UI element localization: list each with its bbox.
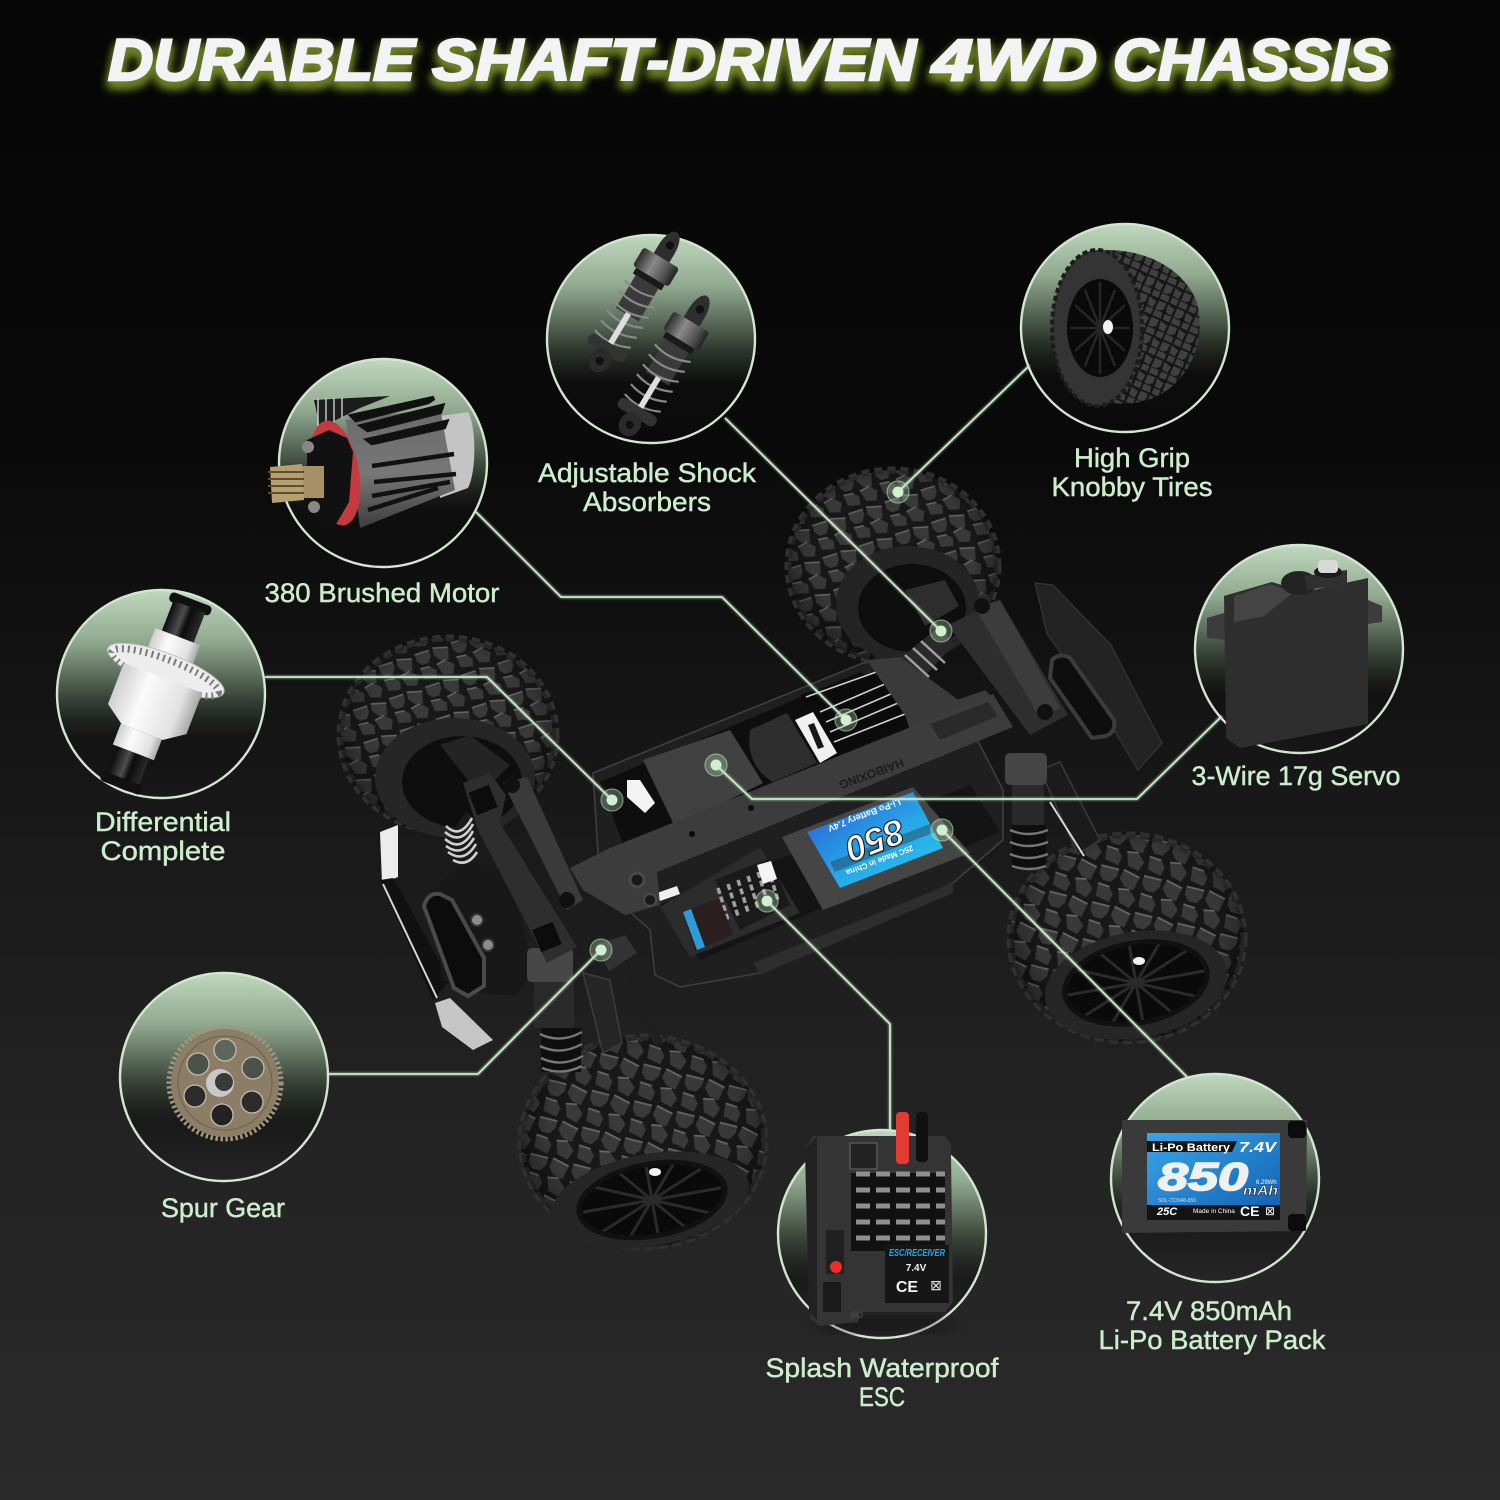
icon: battery pack: mAh bbox=[1243, 1182, 1278, 1198]
icon: battery pack: SDL-723048-850 bbox=[1158, 1198, 1196, 1204]
label: Differential bbox=[95, 807, 231, 837]
panel: spur gear bbox=[120, 973, 328, 1223]
label: ESC bbox=[859, 1382, 905, 1412]
leader line: differential bbox=[265, 677, 612, 800]
tire: left bbox=[340, 638, 556, 838]
rear cross bar bbox=[463, 773, 583, 963]
battery label on chassis: 850 bbox=[840, 811, 911, 870]
label: Adjustable Shock bbox=[538, 458, 757, 488]
label: 3-Wire 17g Servo bbox=[1192, 761, 1400, 791]
panel: servo bbox=[1192, 545, 1403, 791]
label: High Grip bbox=[1074, 443, 1190, 473]
battery body bbox=[782, 787, 970, 910]
label: Splash Waterproof bbox=[766, 1353, 999, 1383]
front hoop bbox=[1050, 655, 1114, 738]
rear knuckle bbox=[595, 935, 637, 971]
tire: bottom bbox=[521, 1037, 765, 1263]
title: SHAFT-DRIVEN bbox=[432, 28, 917, 93]
front lower shock bbox=[1005, 753, 1048, 869]
icon: ESC module: ESC/RECEIVER bbox=[889, 1248, 946, 1259]
icon: motor bbox=[268, 396, 474, 529]
brand text: HAIBOXING bbox=[837, 756, 906, 792]
panel: shock absorbers bbox=[538, 221, 757, 517]
icon: battery pack: 850 bbox=[1158, 1156, 1248, 1199]
leader line: spur gear bbox=[328, 950, 601, 1074]
label: 7.4V 850mAh bbox=[1126, 1296, 1292, 1326]
icon: battery pack: Made in China bbox=[1193, 1208, 1235, 1215]
icon: battery pack: 7.4V bbox=[1239, 1139, 1278, 1156]
icon: ESC module bbox=[805, 1112, 955, 1333]
panel: ESC bbox=[766, 1112, 999, 1412]
icon: ESC module: I/O bbox=[851, 1310, 863, 1320]
battery label on chassis bbox=[807, 792, 943, 888]
callout dots bbox=[590, 481, 953, 961]
front cross bar bbox=[948, 598, 1068, 735]
side skid bbox=[753, 883, 953, 975]
icon: battery pack: 25C bbox=[1156, 1206, 1178, 1218]
gearbox bbox=[430, 862, 534, 996]
front suspension arm bbox=[1040, 762, 1100, 856]
motor bracket bbox=[795, 712, 837, 763]
icon: ESC module: ⊠ bbox=[930, 1277, 942, 1293]
label: Knobby Tires bbox=[1052, 472, 1212, 502]
motor heat sink bbox=[800, 668, 913, 755]
servo housing bbox=[643, 730, 763, 827]
icon: ESC module: CE bbox=[896, 1279, 918, 1296]
front bumper wing bbox=[1035, 583, 1162, 770]
ESC on chassis bbox=[657, 847, 800, 957]
title: CHASSIS bbox=[1113, 28, 1390, 93]
battery label on chassis: 25C Made in China bbox=[844, 843, 914, 877]
leader line: battery bbox=[942, 830, 1190, 1080]
chassis spine bbox=[570, 694, 1013, 915]
leader line: tires bbox=[898, 365, 1030, 492]
icon: tire bbox=[1052, 250, 1200, 406]
panel: motor bbox=[264, 359, 500, 608]
title: DURABLE bbox=[108, 28, 418, 93]
tire: upper right bbox=[788, 470, 998, 662]
panel: differential bbox=[57, 577, 265, 866]
rear bumper strip bbox=[380, 825, 398, 883]
truck chassis illustration bbox=[340, 470, 1244, 1263]
icon: battery pack: ⊠ bbox=[1265, 1204, 1275, 1218]
title bbox=[108, 28, 1390, 93]
front cover bbox=[867, 657, 1000, 745]
bottom arm bbox=[583, 960, 660, 1053]
rear bumper plate bbox=[435, 998, 493, 1050]
title: 4WD bbox=[931, 28, 1097, 93]
panel: battery bbox=[1098, 1074, 1326, 1355]
icon: gear bbox=[169, 1027, 281, 1139]
lower compartment bbox=[660, 785, 1000, 960]
leader line: ESC bbox=[767, 901, 890, 1132]
icon: shock pair bbox=[575, 221, 725, 446]
white linkage bbox=[627, 780, 655, 813]
icon: battery pack bbox=[1122, 1120, 1307, 1233]
icon: battery pack: CE bbox=[1240, 1203, 1259, 1219]
gearbox screws bbox=[471, 914, 494, 951]
label: Spur Gear bbox=[161, 1193, 285, 1223]
rear hoop bbox=[424, 894, 484, 996]
icon: battery pack: Li-Po Battery bbox=[1152, 1142, 1231, 1154]
icon: differential bbox=[63, 577, 251, 810]
battery label on chassis: Li-Po Battery 7.4V bbox=[827, 797, 902, 834]
bottom shock bbox=[527, 948, 583, 1072]
leader line: shocks bbox=[725, 418, 941, 631]
main tub bbox=[593, 658, 1003, 987]
label: Absorbers bbox=[583, 487, 711, 517]
panel: tires bbox=[1021, 224, 1229, 502]
tire: lower right bbox=[1010, 835, 1244, 1053]
front upper shock bbox=[898, 626, 954, 684]
leader line: servo bbox=[716, 716, 1222, 799]
icon: servo bbox=[1207, 560, 1382, 748]
leader lines bbox=[265, 365, 1222, 1132]
motor can bbox=[749, 713, 817, 782]
label: 380 Brushed Motor bbox=[264, 578, 500, 608]
rear bumper rail bbox=[380, 878, 450, 1000]
icon: ESC module: 7.4V bbox=[906, 1263, 927, 1274]
icon: battery pack: 6.29Wh bbox=[1256, 1180, 1277, 1186]
leader line: motor bbox=[475, 511, 846, 720]
label: Li-Po Battery Pack bbox=[1098, 1325, 1326, 1355]
upper compartment bbox=[600, 672, 940, 850]
rear upper shock spring bbox=[444, 811, 486, 863]
label: Complete bbox=[100, 836, 226, 866]
